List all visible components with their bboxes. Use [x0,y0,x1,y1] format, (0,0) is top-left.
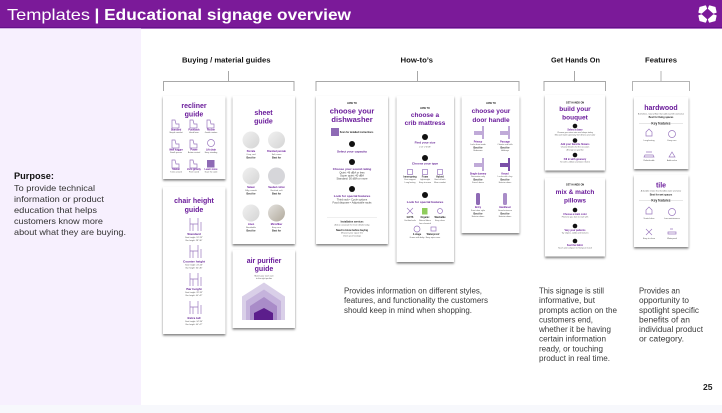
panel: choose your door handle: door handle [472,117,510,124]
panel: choose a crib mattress: 2-stage [413,233,422,236]
panel: choose your door handle: Front door style [471,209,486,212]
panel: build your bouquet: bouquet [562,114,589,122]
bracket: Get Hands On [544,71,606,91]
purpose text block: Purpose: [14,171,54,181]
panel: chair height guide: chair height [174,198,214,205]
panel: choose your door handle: Locks from inside [470,144,487,146]
header bar [0,0,722,29]
panel: choose a crib mattress: Find your size [415,140,436,144]
panel: build your bouquet: GET HANDS ON [566,102,584,104]
panel: mix and match pillows: Find one you love to start with [562,216,588,218]
panel: sheet guide: Microfiber [271,223,282,226]
panel: choose your door handle: Best for [473,146,483,150]
panel: recliner guide: Gentle motion [205,131,217,134]
text block: features description: or category. [639,334,684,344]
panel: choose your door handle: Best for [473,212,483,216]
panel: air purifier guide: air purifier [247,258,282,265]
panel: sheet guide: Silky, smooth [245,189,257,192]
panel: choose your dishwasher: dishwasher [331,115,373,124]
panel: mix and match pillows: Try stripes, solids and textures [561,232,589,234]
panel: choose a crib mattress: More comfort [434,181,446,184]
panel: recliner guide: Button control [188,151,201,154]
text block: how-to description: Provides information on different styles, [344,286,482,296]
panel: sheet guide: Brushed percale [267,150,287,153]
panel: sheet guide: Brushed, soft [271,189,283,192]
panel: hardwood features: Long-lasting [644,139,654,142]
panel: mix and match pillows [545,178,605,256]
panel: sheet guide: Best for [246,192,256,196]
panel: choose a crib mattress: Easy clean [435,220,445,222]
panel: build your bouquet: Choose blooms for the occasion [561,146,589,148]
panel: build your bouquet: Add your favorite flowers [561,143,590,146]
panel: choose your door handle: French doors [472,182,484,184]
panel: choose a crib mattress: GOTS [407,216,414,219]
panel: hardwood features: Easy care [668,140,677,142]
panel: choose your dishwasher: Check your hookups [343,236,361,238]
panel: choose your dishwasher: Ask an associate for more details today [335,224,369,226]
panel: choose your dishwasher: choose your [330,106,374,116]
panel: sheet guide: Breathable [246,226,257,229]
panel: chair height guide: guide [185,207,203,214]
panel: choose your dishwasher: Super quiet: 40 dBA [340,174,364,178]
panel: choose your door handle: Single dummy [470,172,487,176]
panel: choose your door handle: Closets and halls [497,143,513,146]
panel: mix and match pillows: GET HANDS ON [566,184,584,186]
panel: tile features [634,175,688,247]
panel: recliner guide: Zero gravity [187,168,202,171]
text block: get hands on description: This signage is still [539,286,604,296]
panel: sheet guide: Best for [246,156,256,160]
panel: sheet guide [232,96,295,244]
panel: recliner guide: Learn more [204,168,218,171]
panel: sheet guide: Sueded cotton [268,186,285,189]
panel: choose a crib mattress: Natural fibers [419,219,431,222]
panel: sheet guide: guide [254,118,273,126]
panel: tile features: tile [656,182,666,190]
panel: recliner guide: Wall hugger [169,148,183,152]
panel: choose your door handle [462,96,520,233]
panel: choose a crib mattress: HOW TO [420,107,430,110]
purpose text block: customers know more [14,216,103,226]
panel: choose a crib mattress: Easy wipe cover [426,237,441,239]
panel: recliner guide: recliner [181,103,207,110]
panel: choose your door handle: Entry [475,206,482,209]
panel: choose your dishwasher: Look for special features [334,194,371,198]
panel: build your bouquet: Mix and match greenery for fullness and color [555,134,596,136]
panel: choose a crib mattress: Best of both [435,178,445,181]
panel: choose your door handle: Keyed [501,172,509,176]
panel: mix and match pillows: Feel the fabric [567,244,584,247]
panel: mix and match pillows: mix & match [556,189,594,196]
purpose text block: To provide technical [14,183,95,193]
panel: chair height guide: Bar height: 28"-30" [186,239,203,242]
panel: choose your dishwasher: Quiet: 46 dBA or less [339,170,365,174]
panel: build your bouquet: build your [559,106,591,113]
panel: sheet guide: Sateen [247,186,255,189]
panel: choose your door handle: Hallways [501,150,509,152]
bracket: Features [632,71,690,91]
panel: choose a crib mattress: choose a [411,112,439,119]
panel: mix and match pillows: Touch and compare to find your match [558,246,592,250]
bracket: Buying / material guides [164,71,294,91]
purpose text block: about what they are buying. [14,227,126,237]
panel: choose your door handle: Grand entrance [498,209,513,212]
text block: how-to description: features, and functionality the customers [344,296,488,305]
bottom band [0,405,722,413]
panel: choose a crib mattress: Washable [434,216,446,219]
panel: choose a crib mattress: Certified safe [404,219,417,222]
panel: sheet guide: Linen [248,223,255,226]
panel: recliner guide: Feet raised [189,170,199,174]
text block: get hands on description: ready, or touching [539,344,603,354]
panel: choose a crib mattress: Organic [420,216,430,219]
panel: choose a crib mattress: Foam [422,176,428,178]
panel: chair height guide [163,187,226,334]
panel: choose your dishwasher: Choose your sound rating [333,167,371,171]
panel: sheet guide: Crisp, cool [246,154,256,156]
panel: tile features: Easy to clean [643,237,655,240]
purpose text block [14,171,126,237]
panel: choose your door handle: Exterior doors [499,181,511,184]
panel: recliner guide: Pushback [188,128,200,132]
purpose text block: information or product [14,194,105,204]
panel: sheet guide: Easy care [272,227,282,229]
panel: sheet guide: Best for [272,192,281,196]
panel: choose your dishwasher: Select your capacity [337,150,367,154]
panel: chair height guide: Standard [187,232,201,236]
panel: choose your door handle: Handleset [499,206,511,209]
panel: chair height guide: Bar height: 44"-47" [186,323,203,326]
panel: choose a crib mattress: Firm support [404,178,416,181]
panel: air purifier guide: Match your room size [254,274,274,278]
heading: Features: Features [645,58,677,64]
panel: air purifier guide [232,250,295,328]
text block: features description [639,286,704,344]
panel: build your bouquet: Tie with a ribbon and take it home [560,160,591,164]
panel: recliner guide: Lift chair [206,148,216,152]
panel: build your bouquet: Select a base [567,128,583,132]
panel: choose your door handle: HOW TO [486,102,496,105]
panel: mix and match pillows: pillows [564,198,586,204]
text block: features description: individual product [639,325,704,334]
heading: Get Hands On: Get Hands On [551,58,600,64]
panel: recliner guide: guide [185,112,203,118]
panel: choose your dishwasher: Third rack • Cycle options [337,198,368,202]
panel: sheet guide: Percale [247,150,256,153]
panel: choose a crib mattress: Hybrid [436,176,444,178]
panel: build your bouquet: Fill in with greenery [564,158,587,161]
bracket: How-to's [316,71,519,91]
title separator and subtitle: | Educational signage overview [94,7,352,24]
panel: choose your door handle: Bedrooms [473,150,483,152]
panel: build your bouquet: Arrange as you like [566,148,584,152]
text block: features description: benefits of an [639,316,690,324]
panel: choose your door handle: Passage [500,140,511,144]
panel: recliner guide: Power [190,148,198,152]
panel: choose a crib mattress: Grows with baby [410,236,424,239]
panel: choose a crib mattress: Long lasting [405,181,415,184]
panel: choose your dishwasher: Measure your space first [341,232,363,234]
panel: choose your door handle: Best for [500,178,510,182]
text block: features description: opportunity to [639,296,690,305]
panel: chair height guide: Seat height: 34"-36" [185,320,203,323]
text block: features description: spotlight specific [639,306,699,315]
panel: chair height guide: Extra tall [187,316,201,320]
panel: hardwood features: Refinishable [643,160,655,162]
panel: choose a crib mattress: Easy to move [419,181,432,184]
panel: sheet guide: Best for [272,230,281,232]
text block: get hands on description [538,286,618,363]
heading: How-to's: How-to’s [400,58,433,64]
panel: recliner guide: Hand lever [189,132,199,134]
text block: get hands on description: product in real time. [539,354,610,363]
text block: features description: Provides an [639,286,680,296]
heading: Buying / material guides: Buying / material guides [182,58,271,64]
panel: air purifier guide: guide [255,266,273,273]
panel: choose your dishwasher: HOW TO [347,102,357,105]
panel: recliner guide: Swivel [172,168,180,171]
panel: sheet guide: Best for [246,230,256,232]
panel: recliner guide: Turns around [170,172,182,174]
purpose text block: education that helps [14,205,97,215]
panel: mix and match pillows: Choose a main color [563,213,587,216]
panel: choose your dishwasher: Installation services [341,220,364,224]
panel: mix and match pillows: Vary your patterns [564,229,586,232]
panel: hardwood features: Best for living spaces [649,116,674,119]
panel: choose your dishwasher: Need to know before buying [336,229,369,232]
panel: choose your dishwasher [316,96,388,244]
page number: 25 [703,382,713,392]
text block: get hands on description: certain information [539,334,606,344]
panel: choose a crib mattress: Lightweight [420,178,430,181]
panel: recliner guide: Standard [171,128,182,132]
panel: chair height guide: Bar height [186,287,202,291]
panel: choose your door handle: Privacy [474,140,483,144]
panel: choose a crib mattress [396,96,454,262]
panel: tile features: Best for wet spaces [650,194,673,196]
panel: choose a crib mattress: Innerspring [403,176,417,178]
sidebar panel [0,28,141,405]
panel: sheet guide: Best for [272,156,281,160]
panel: choose your door handle: Best for [473,178,483,182]
panel: tile features: Low maintenance [664,217,681,220]
panel: recliner guide: Small spaces [170,152,182,154]
panel: choose your door handle: Locks with a key [498,175,512,178]
panel: choose your door handle: Best for [500,212,510,216]
panel: choose a crib mattress: crib mattress [405,120,446,127]
panel: build your bouquet [545,95,605,170]
panel: choose your door handle: Decorative only [471,175,485,178]
panel: hardwood features [634,97,688,169]
text block: how-to description [344,286,488,315]
panel: tile features: Scratch-free [644,217,655,220]
panel: recliner guide: Rocker [207,128,215,132]
panel: hardwood features: Adds value [667,159,678,162]
panel: choose your dishwasher: Standard: 50 dBA or more [336,176,368,180]
panel: chair height guide: Seat height: 18"-23" [185,236,203,239]
panel: air purifier guide: to the right purifier [256,277,272,280]
panel: hardwood features: Key features [651,122,671,126]
panel: recliner guide: Scan the code [205,170,218,174]
panel: choose a crib mattress: Waterproof [427,233,440,236]
panel: recliner guide [163,96,226,179]
icon: brand logo [699,6,716,22]
panel: choose your door handle: Exterior doors [472,215,484,218]
panel: choose a crib mattress: Look for special features [407,200,444,204]
panel: choose your door handle: Exterior doors [499,215,511,218]
panel: choose your door handle: choose your [472,108,511,115]
panel: hardwood features: hardwood [644,105,678,112]
text block: get hands on description: customers end, [539,316,593,324]
panel: recliner guide: Simple comfort [169,131,183,134]
panel: tile features: Key features [651,198,671,202]
panel: choose your dishwasher: Scan for detailed instructions [340,131,374,134]
text block: how-to description: should keep in mind when shopping. [344,306,472,315]
panel: recliner guide: Easy standing [205,151,217,154]
text block: get hands on description: informative, but [539,296,596,305]
panel: chair height guide: Counter height [183,260,205,264]
panel: tile features: A durable choice that handles water and wear [641,190,682,192]
panel: sheet guide: sheet [254,110,273,117]
panel: hardwood features: A timeless, natural floor that adds warmth and value [638,112,685,116]
text block: get hands on description: prompts action on the [539,306,618,315]
panel: chair height guide: Seat height: 24"-26" [185,264,203,266]
panel: build your bouquet: Choose your stem size and shape today [557,131,593,134]
panel: choose your door handle: Best for [500,146,510,150]
text block: get hands on description: whether it be having [538,325,611,334]
panel: chair height guide: Bar height: 40"-42" [186,294,203,297]
panel: sheet guide: Soft, warm [272,153,282,156]
panel: chair height guide: Seat height: 28"-33" [185,291,203,294]
panel: chair height guide: Bar height: 34"-36" [186,266,203,270]
panel: choose a crib mattress: Choose your type [412,162,438,166]
panel: choose a crib mattress: Low chemical [419,223,432,225]
panel: choose a crib mattress: L 52" x W 28" [419,146,431,148]
panel: choose your dishwasher: Food disposer • Adjustable racks [332,200,372,204]
panel: tile features: Waterproof [667,237,677,240]
title: Templates [7,7,90,24]
